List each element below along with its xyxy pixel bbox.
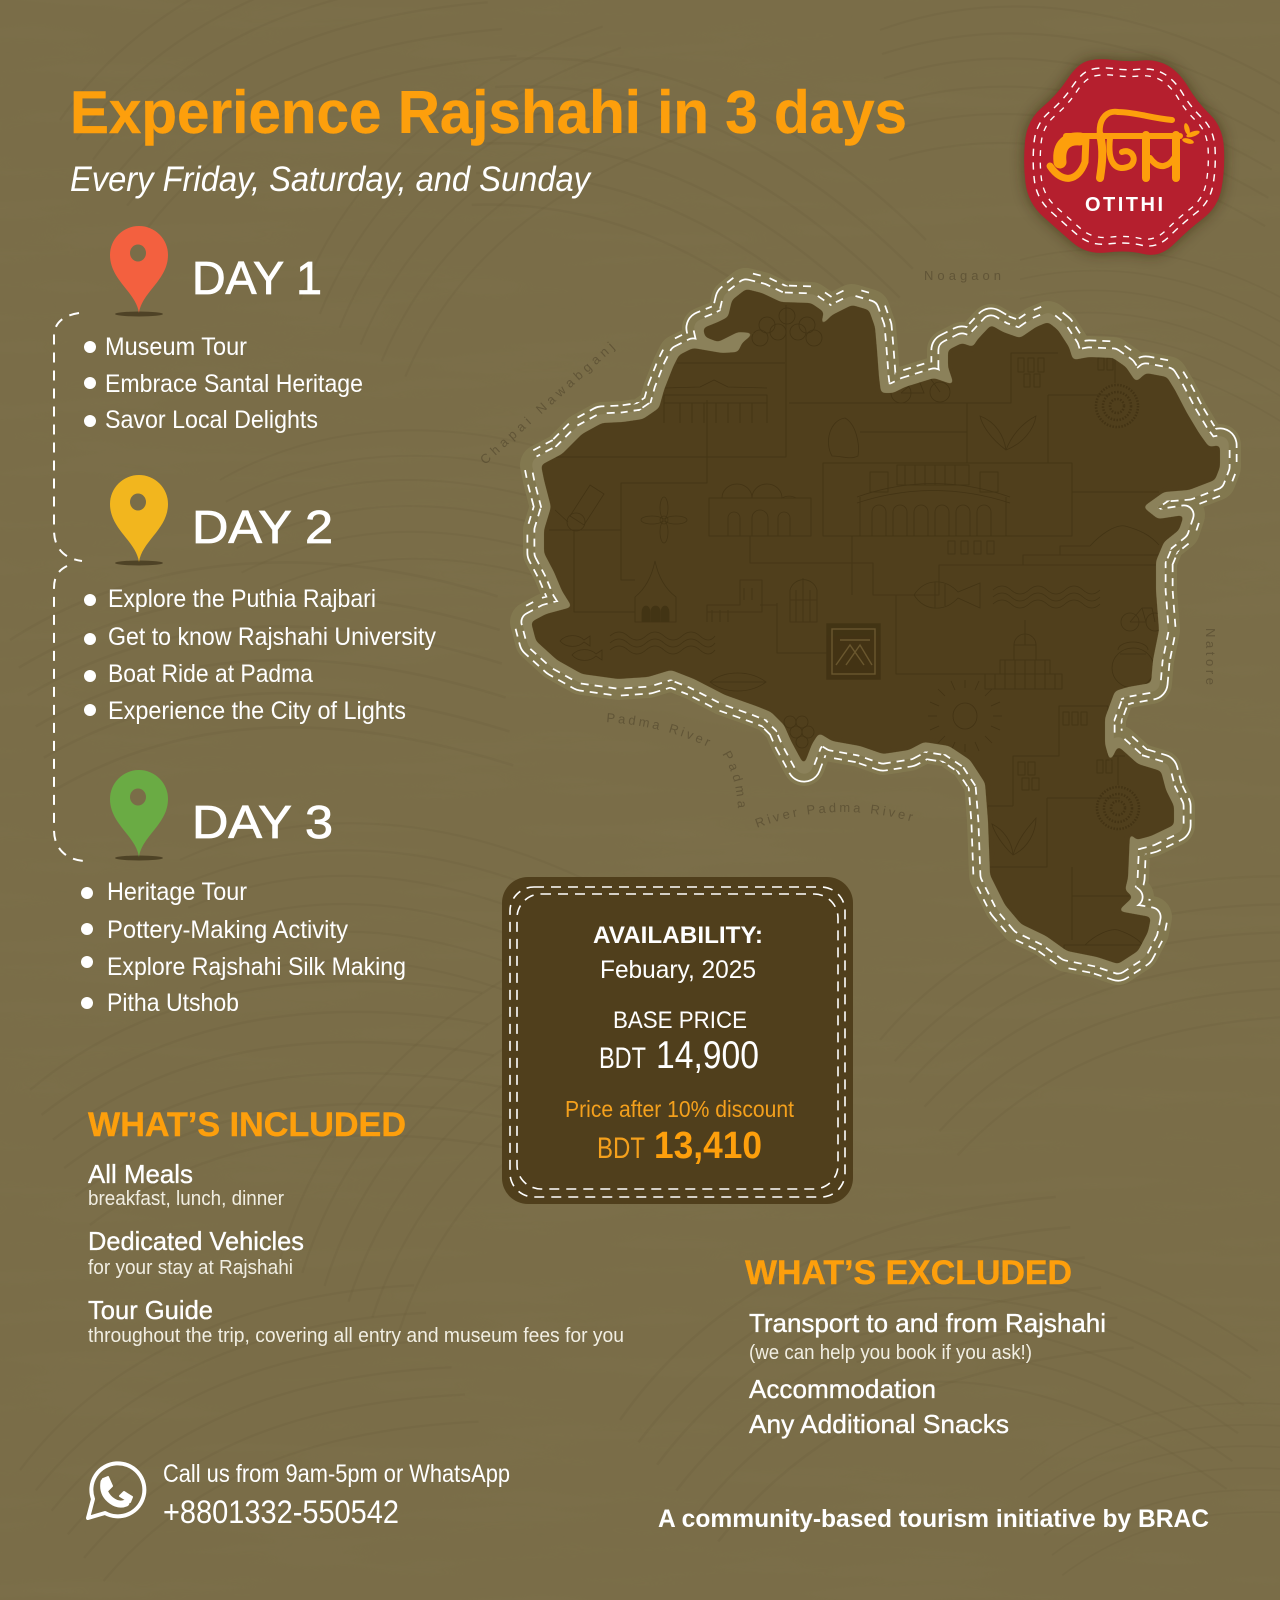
map label: Chapai Nawabganj: Chapai Nawabganj [477,337,619,467]
pin: day 3 [110,770,168,860]
logo: Otithi seal [1024,59,1224,255]
list: day 2 [84,585,436,725]
map icon: main palace [850,465,1012,536]
heading: day 2: DAY 2 [192,501,333,553]
map icon: leaves 2 [992,818,1036,855]
list: day 3: Pitha Utshob [107,989,239,1017]
base price label: BASE PRICE [613,1007,747,1034]
map: dark region [531,289,1220,964]
map icon: sun [928,680,1002,752]
map icon: flower [641,497,687,543]
list: day 2: Get to know Rajshahi University [108,623,436,651]
map icon: tiered building [985,620,1062,689]
list: day 1: Museum Tour [105,333,247,361]
discounted price value: BDT [597,1132,645,1165]
footer credit: A community-based tourism initiative by BRAC [658,1505,1209,1533]
list: day 2: Boat Ride at Padma [108,660,313,688]
map: halo and stitched border [531,289,1220,964]
list: day 3: Explore Rajshahi Silk Making [107,953,406,981]
map icon: ornament disc 2 [1097,787,1139,829]
item note: meals: breakfast, lunch, dinner [88,1188,284,1210]
map icon: ornament disc [1096,385,1138,427]
map icon: tree [752,305,822,346]
base price value: 14,900 [656,1034,759,1077]
item: tour guide: Tour Guide [88,1295,213,1325]
availability: AVAILABILITY: [593,922,763,949]
section: what's excluded [745,1254,1106,1439]
dashed itinerary connector [54,313,84,861]
list: day 2: Explore the Puthia Rajbari [108,585,376,613]
panel: stitched border [510,887,845,1197]
contact text [163,1460,510,1530]
map icon: leaves [980,416,1036,450]
list: day 2: Experience the City of Lights [108,697,406,725]
map icon: bicycle [891,378,950,403]
map label: Noagaon: Noagaon [924,268,1004,283]
map label: Natore: Natore [1203,628,1218,688]
item note: transport: (we can help you book if you ask!) [749,1342,1032,1364]
panel: availability and price [502,877,853,1204]
base price value [599,1034,759,1077]
availability date: Febuary, 2025 [600,956,756,984]
map icon: hand tool [555,485,604,531]
pin: day 1 [110,226,168,316]
logo: Otithi seal: OTITHI [1085,194,1163,216]
icon: whatsapp [88,1463,144,1518]
item: all meals: All Meals [88,1159,193,1189]
list: day 3: Pottery-Making Activity [107,916,348,944]
map icon: window blocks [948,358,1113,790]
map icon: bicycle 2 [1121,608,1164,631]
map label: Padma River: Padma [722,750,745,808]
list: day 1: Savor Local Delights [105,406,318,434]
pin: day 2 [110,475,168,566]
map of Rajshahi division [531,289,1220,964]
map label: Padma River: Padma River [607,713,710,746]
heading: day 1: DAY 1 [192,252,322,304]
included heading: WHAT’S INCLUDED [88,1106,406,1144]
map icon: waves left [610,632,715,654]
contact text: Call us from 9am-5pm or WhatsApp [163,1460,510,1488]
map icon: stepped building [707,580,762,622]
map icon: mango [828,418,858,458]
base price value: BDT [599,1042,646,1075]
map icon: clay pot [1112,642,1154,688]
item: snacks: Any Additional Snacks [749,1409,1009,1439]
map icon: hills and stupa [1023,526,1159,565]
subtitle: Every Friday, Saturday, and Sunday [70,160,592,199]
discount label: Price after 10% discount [565,1096,795,1122]
title: Experience Rajshahi in 3 days [70,79,907,146]
map icon: arched window [790,578,817,622]
item: transport: Transport to and from Rajshahi [749,1308,1106,1338]
map icon: leaf [710,673,766,691]
map icon: old palace [664,380,767,423]
map icon: hills and stupa 2 [1064,930,1142,949]
map icon: mosque [709,484,811,536]
map: line illustrations [541,305,1164,959]
list: day 1: Embrace Santal Heritage [105,370,363,398]
item: vehicles: Dedicated Vehicles [88,1226,304,1256]
list: day 3 [81,878,406,1017]
map icon: small fish [560,636,602,660]
discounted price value: 13,410 [654,1125,762,1167]
list: day 1 [84,333,363,434]
map icon: terracotta panel [827,624,880,679]
section: what's included [88,1106,624,1347]
list: day 3: Heritage Tour [107,878,247,906]
map icon: fish [914,582,980,608]
discounted price value [597,1125,762,1167]
item: accommodation: Accommodation [749,1374,936,1404]
map label: Padma River: River Padma River [755,802,913,828]
excluded heading: WHAT’S EXCLUDED [745,1254,1072,1292]
map icon: temple [635,561,676,622]
item note: guide: throughout the trip, covering all entry and museum fees for you [88,1325,624,1347]
map icon: grapes [784,716,814,748]
contact text: +8801332-550542 [163,1494,399,1530]
map label: Padma River [607,713,913,828]
map icon: waves right [993,586,1100,608]
item note: vehicles: for your stay at Rajshahi [88,1257,293,1279]
heading: day 3: DAY 3 [192,796,333,848]
